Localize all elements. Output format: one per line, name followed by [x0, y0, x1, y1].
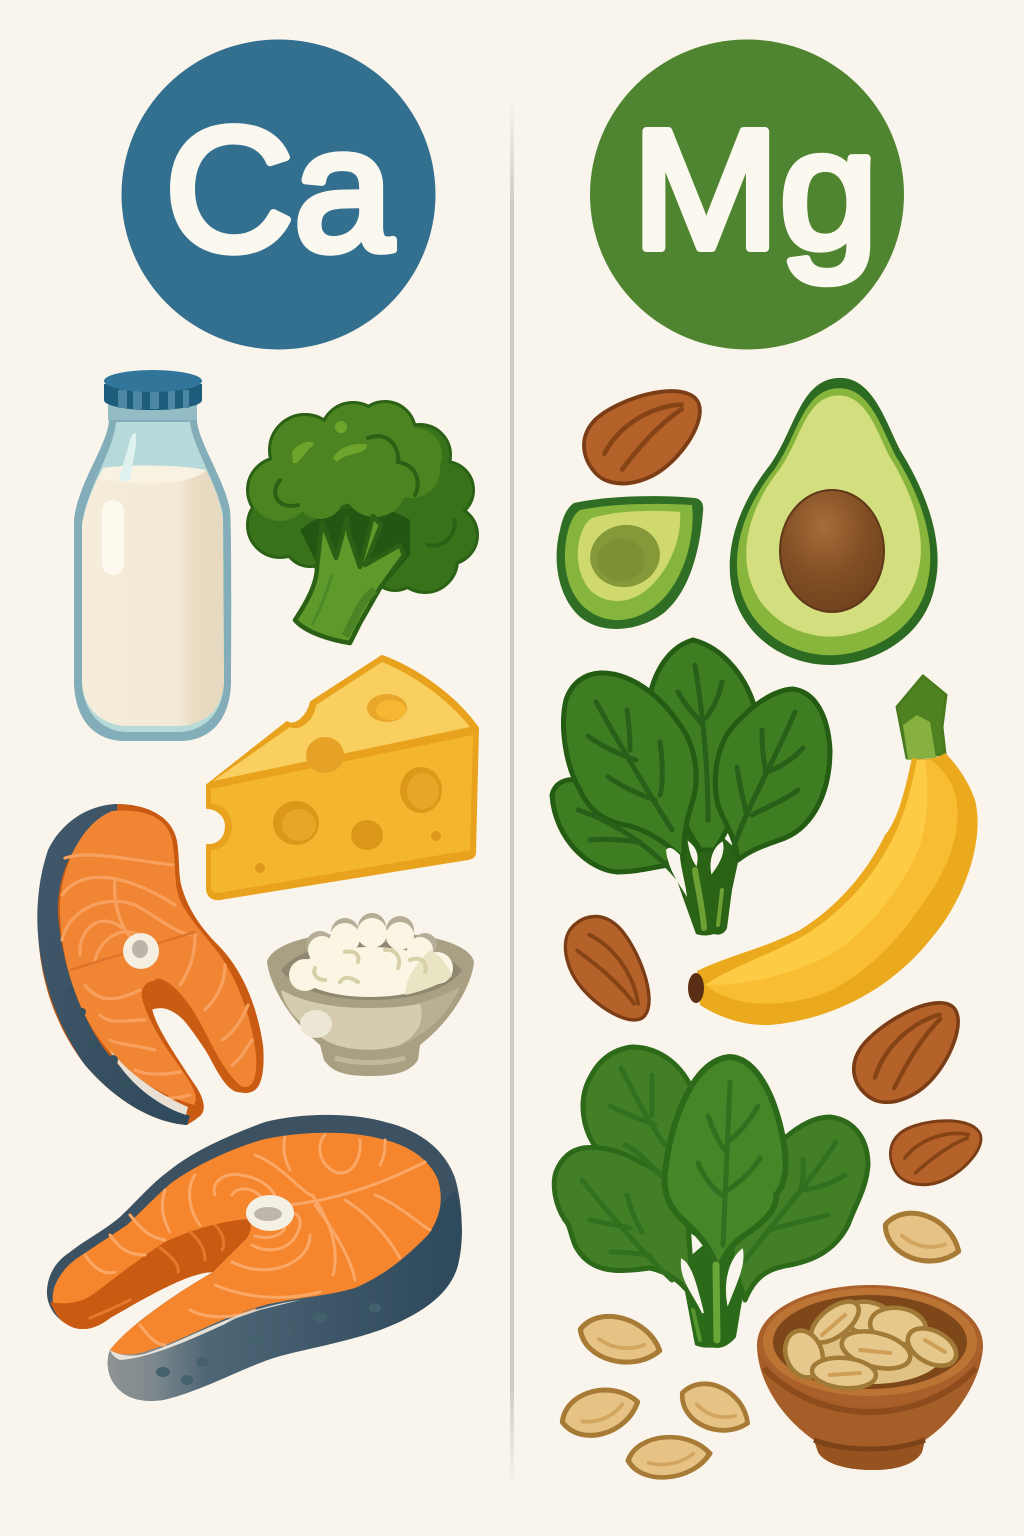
- calcium badge: [122, 40, 436, 350]
- icon: pumpkin seed lower left: [557, 1381, 643, 1443]
- icon: wooden bowl of seeds: [757, 1285, 983, 1470]
- icon: spinach bunch top: [552, 640, 830, 936]
- icon: small avocado slice: [557, 496, 703, 629]
- icon: almond left: [550, 904, 668, 1037]
- calcium badge: Ca: [165, 92, 393, 288]
- magnesium badge: [590, 40, 904, 350]
- icon: cheese wedge: [207, 656, 478, 899]
- icon: pumpkin seed right: [878, 1204, 966, 1272]
- icon: almond right upper: [839, 982, 980, 1119]
- icon: horizontal salmon steak: [47, 1115, 462, 1401]
- icon: almond right lower: [883, 1107, 990, 1194]
- icon: pumpkin seed upper left: [575, 1308, 665, 1372]
- icon: spinach bunch bottom: [554, 1047, 868, 1348]
- icon: milk bottle: [74, 370, 231, 741]
- icon: large avocado half: [730, 378, 938, 665]
- icon: bowl of cottage cheese: [267, 913, 474, 1076]
- icon: upright salmon steak: [37, 804, 264, 1125]
- icon: pumpkin seed bottom: [626, 1434, 712, 1480]
- icon: broccoli: [249, 403, 476, 643]
- icon: pumpkin seed middle: [673, 1374, 757, 1442]
- center divider: [510, 100, 514, 1490]
- icon: banana: [688, 676, 978, 1025]
- magnesium badge: Mg: [632, 95, 878, 285]
- icon: almond top: [570, 369, 719, 500]
